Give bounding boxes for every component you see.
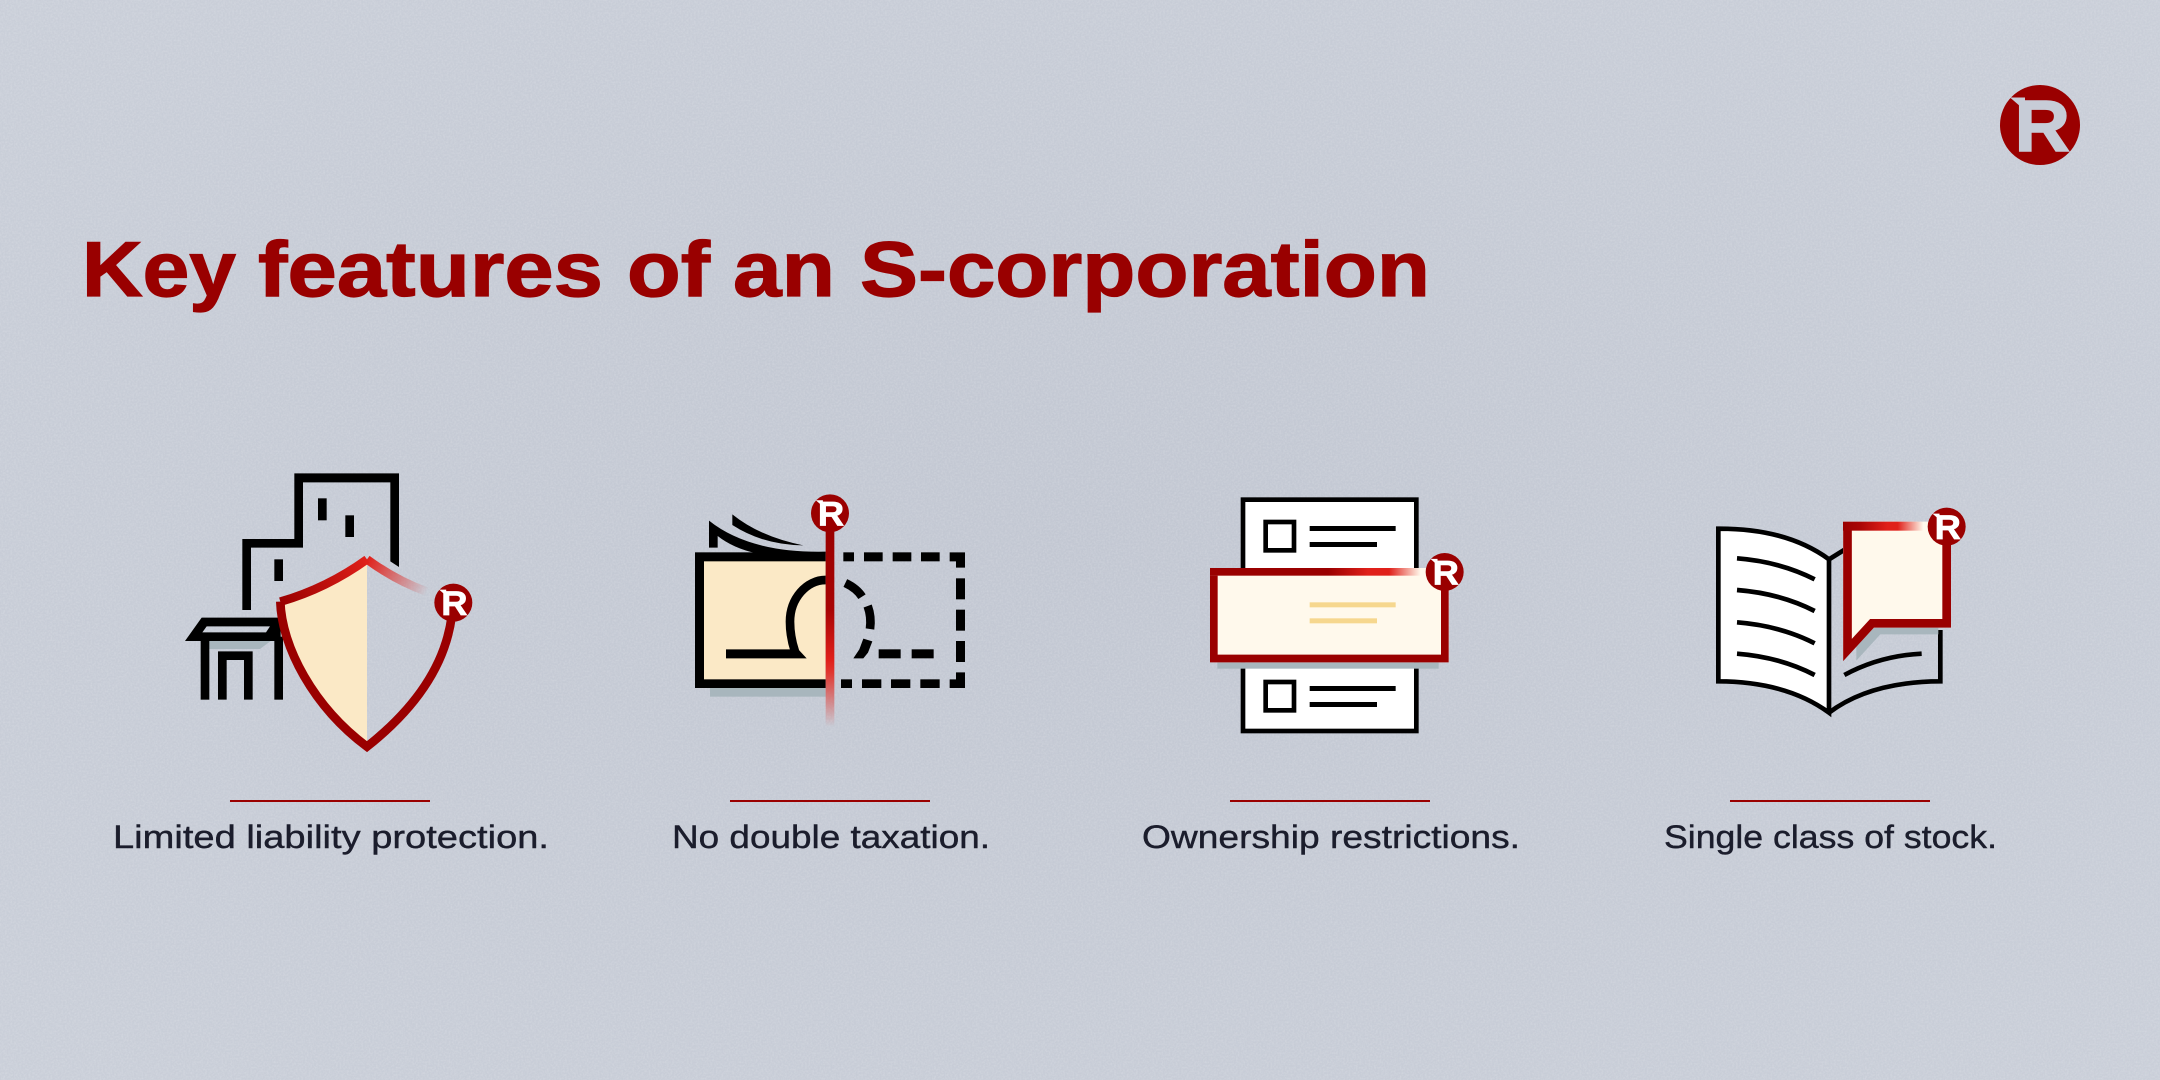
- logo: R: [2015, 87, 2070, 167]
- badge: [434, 584, 472, 623]
- label: Single class of stock.: [1664, 819, 1997, 855]
- divider: [230, 800, 430, 802]
- tall building: [242, 473, 399, 610]
- badge: [1426, 553, 1464, 592]
- dashed half of note: [841, 552, 965, 688]
- label: Limited liability protection.: [113, 819, 549, 855]
- badge: R: [818, 496, 844, 534]
- document: [1243, 500, 1416, 731]
- panel: no double taxation: [672, 494, 990, 855]
- title: an: [733, 225, 835, 313]
- speech bubble: [1843, 522, 1951, 661]
- open book: [1718, 529, 1940, 713]
- icon: building and shield: [185, 473, 472, 747]
- small building: [185, 618, 283, 700]
- title: [82, 225, 1430, 313]
- back notes: [709, 514, 826, 553]
- divider: [730, 800, 930, 802]
- red divider bar: [826, 532, 834, 727]
- divider: [1230, 800, 1430, 802]
- panel: single class of stock: [1664, 508, 1997, 855]
- divider: [1730, 800, 1930, 802]
- logo: [2000, 85, 2080, 167]
- shield: [280, 559, 452, 747]
- badge: [1928, 508, 1966, 547]
- badge: R: [1433, 554, 1459, 592]
- badge: [811, 494, 849, 534]
- badge: R: [441, 585, 468, 623]
- icon: document with highlighted row: [1210, 500, 1464, 731]
- icon: open book with speech bubble: [1718, 508, 1966, 713]
- label: Ownership restrictions.: [1142, 819, 1520, 855]
- title: of: [627, 225, 711, 313]
- title: S-corporation: [860, 225, 1430, 313]
- solid half of note: [695, 552, 826, 697]
- badge: R: [1935, 509, 1961, 547]
- panel: limited liability protection: [113, 473, 549, 855]
- panel: ownership restrictions: [1142, 500, 1520, 855]
- label: No double taxation.: [672, 819, 990, 855]
- title: Key: [82, 225, 236, 313]
- highlighted row: [1210, 568, 1449, 669]
- icon: banknote split: [695, 494, 965, 727]
- title: features: [258, 225, 603, 313]
